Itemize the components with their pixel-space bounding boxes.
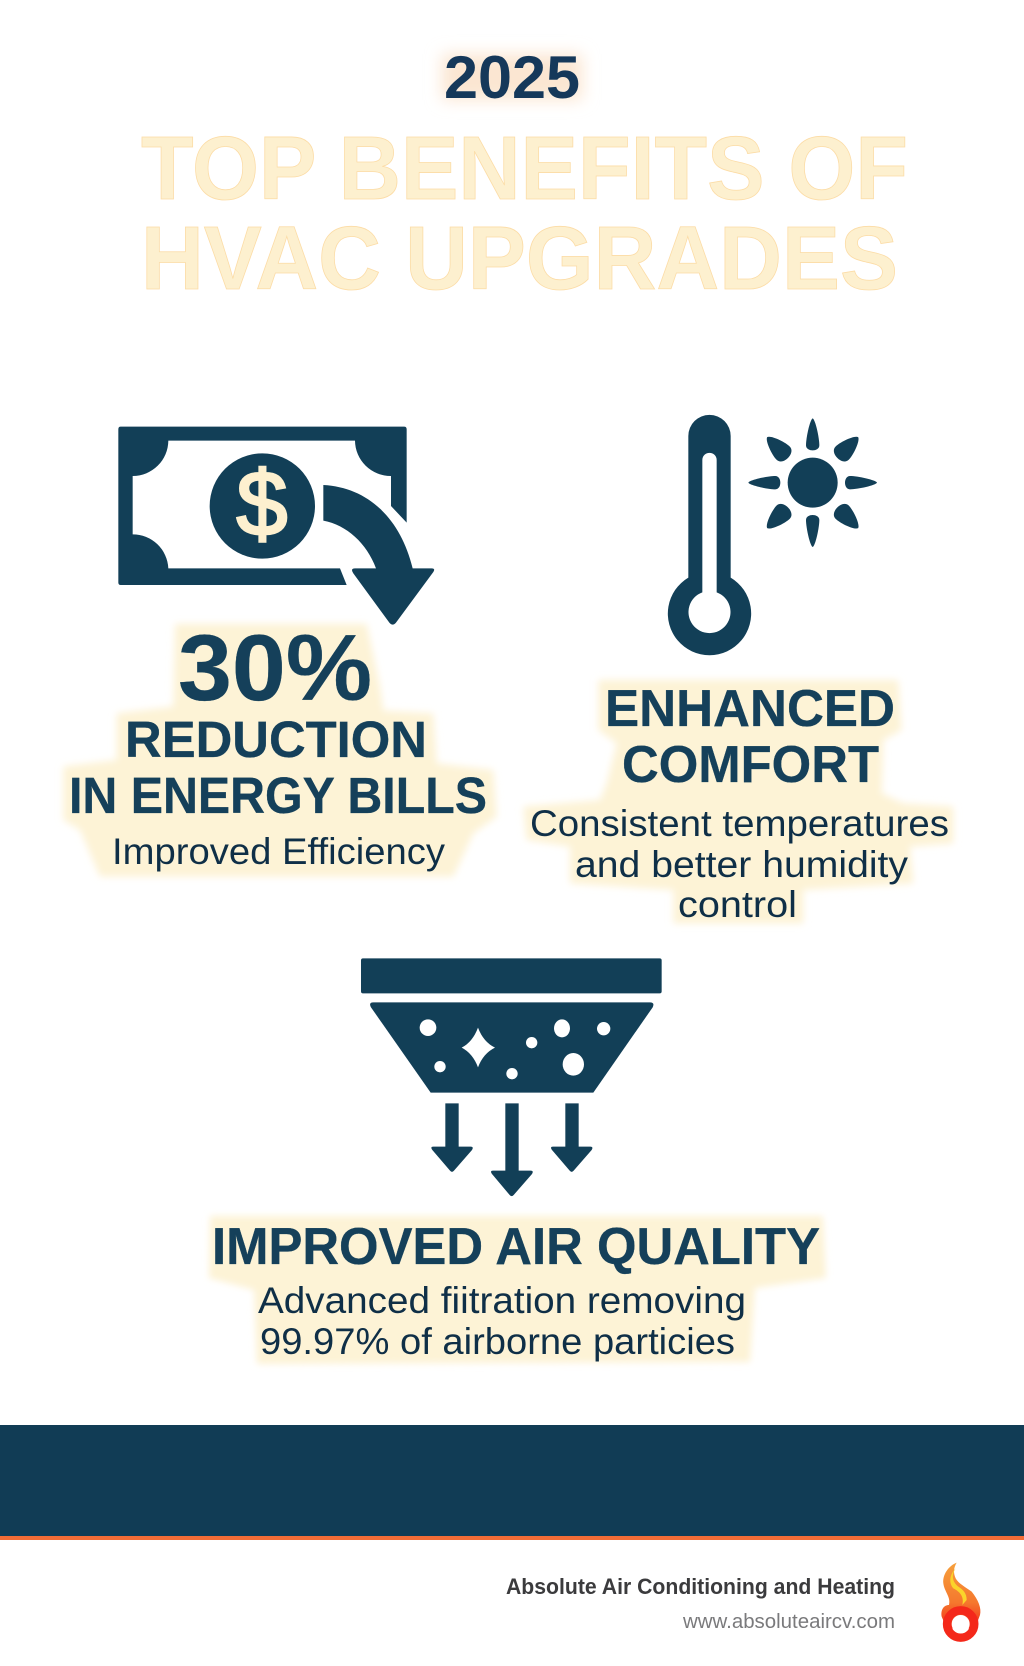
heading: reduction in energy bills	[69, 711, 487, 824]
subtext: filtration description	[258, 1280, 746, 1362]
highlight behind comfort text	[523, 680, 953, 923]
heading: enhanced comfort: ENHANCED	[605, 680, 895, 738]
heading: reduction in energy bills: REDUCTION	[125, 711, 427, 768]
icon: thermometer and sun	[668, 415, 877, 655]
icon: dollar bill with down arrow	[118, 427, 434, 625]
main title	[141, 119, 908, 309]
highlight behind savings text	[63, 624, 497, 877]
subtext: filtration description: Advanced fiitration removing	[258, 1280, 746, 1321]
heading: improved air quality: IMPROVED AIR QUALITY	[212, 1218, 820, 1276]
panel: improved air quality	[209, 958, 826, 1364]
subtext: comfort description: and better humidity	[575, 844, 909, 885]
highlight behind air quality text	[209, 1216, 826, 1364]
year glow	[442, 54, 582, 100]
subtext: improved efficiency: Improved Efficiency	[112, 831, 446, 872]
footer banner	[0, 1425, 1024, 1540]
panel: enhanced comfort	[523, 415, 953, 925]
subtext: comfort description	[530, 803, 949, 925]
icon: dollar bill with down arrow: $	[236, 453, 288, 555]
panel: energy savings	[63, 427, 497, 877]
year heading: 2025	[444, 44, 580, 111]
stat: 30%: 30%	[178, 615, 372, 720]
main title: TOP BENEFITS OF	[141, 119, 908, 219]
heading: enhanced comfort	[605, 680, 895, 794]
footer company name: Absolute Air Conditioning and Heating	[506, 1574, 895, 1599]
title block	[141, 44, 908, 309]
subtext: comfort description: control	[678, 884, 797, 925]
footer website: www.absoluteaircv.com	[682, 1611, 895, 1633]
main title: HVAC UPGRADES	[141, 209, 898, 309]
heading: enhanced comfort: COMFORT	[622, 736, 879, 794]
subtext: comfort description: Consistent temperatures	[530, 803, 949, 844]
icon: flame logo	[941, 1563, 980, 1638]
heading: reduction in energy bills: IN ENERGY BILLS	[69, 767, 487, 824]
icon: air filter with arrows	[361, 958, 662, 1196]
subtext: filtration description: 99.97% of airborne particies	[260, 1321, 735, 1362]
